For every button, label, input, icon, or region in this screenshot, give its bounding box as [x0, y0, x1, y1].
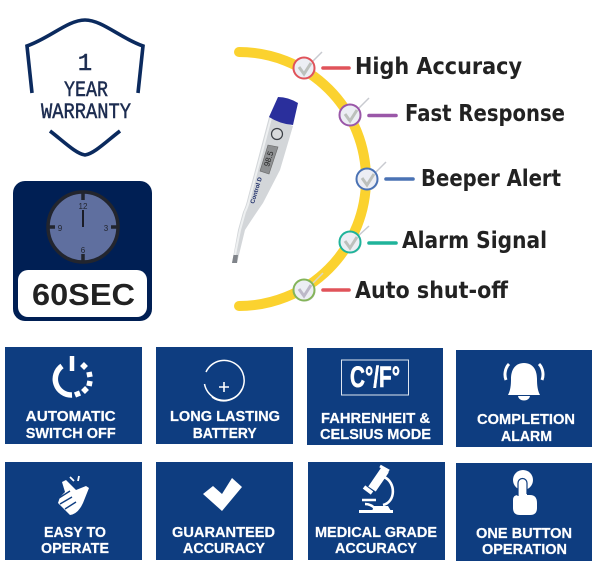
check marker: fast response: [340, 98, 369, 126]
panel: medical grade accuracy: ACCURACY: [335, 541, 417, 557]
thermometer: 98.5: [262, 150, 276, 168]
panel: fahrenheit and celsius mode: CELSIUS MODE: [320, 427, 431, 443]
panel: long lasting battery: LONG LASTING: [170, 409, 280, 425]
panel: long lasting battery: [156, 347, 293, 444]
panel: guaranteed accuracy: GUARANTEED: [172, 525, 275, 541]
panel: easy to operate: EASY TO: [44, 525, 106, 541]
warranty shield badge: YEAR: [64, 78, 108, 103]
check marker: beeper alert: [356, 162, 386, 190]
feature labels: Beeper Alert: [421, 166, 561, 192]
feature labels: [355, 54, 565, 304]
60 second clock tile: 12: [79, 202, 88, 211]
panel: automatic switch off: [5, 347, 142, 444]
panel: completion alarm: ALARM: [501, 429, 552, 445]
panel: automatic switch off: SWITCH OFF: [26, 426, 116, 442]
panel: one button operation: ONE BUTTON: [476, 526, 572, 542]
panel: medical grade accuracy: [308, 462, 445, 560]
warranty shield badge: 1: [78, 51, 92, 78]
thermometer: [232, 97, 298, 263]
feature labels: High Accuracy: [355, 54, 522, 80]
panel: easy to operate: [5, 462, 142, 560]
60 second clock tile: 9: [58, 224, 63, 233]
60 second clock tile: 6: [81, 246, 86, 255]
feature labels: Auto shut-off: [355, 278, 508, 304]
thermometer: Control D: [250, 176, 264, 205]
panel: fahrenheit and celsius mode: FAHRENHEIT &: [321, 411, 431, 427]
check marker: high accuracy: [294, 52, 322, 80]
yellow arc: [239, 52, 366, 306]
panel: fahrenheit and celsius mode: C°/F°: [350, 361, 400, 394]
warranty shield badge: WARRANTY: [41, 100, 131, 125]
panel: easy to operate: OPERATE: [41, 541, 109, 557]
60 second clock tile: 60SEC: [32, 277, 135, 312]
warranty shield badge: [27, 20, 143, 155]
panel: guaranteed accuracy: [156, 462, 293, 560]
feature labels: Alarm Signal: [402, 228, 547, 254]
check marker: auto shut-off: [294, 273, 323, 302]
panel: medical grade accuracy: MEDICAL GRADE: [315, 525, 437, 541]
panel: one button operation: [456, 463, 592, 561]
panel: one button operation: OPERATION: [482, 542, 567, 558]
panel: guaranteed accuracy: ACCURACY: [183, 541, 265, 557]
feature labels: Fast Response: [405, 101, 565, 127]
panel: automatic switch off: AUTOMATIC: [26, 409, 116, 425]
panel: completion alarm: COMPLETION: [477, 412, 575, 428]
60 second clock tile: 3: [104, 224, 109, 233]
connector dashes: [323, 68, 413, 290]
check marker: alarm signal: [340, 226, 369, 254]
panel: long lasting battery: BATTERY: [193, 426, 257, 442]
panel: fahrenheit and celsius mode: [307, 348, 443, 445]
panel: completion alarm: [456, 350, 592, 447]
60 second clock tile: [13, 181, 152, 321]
